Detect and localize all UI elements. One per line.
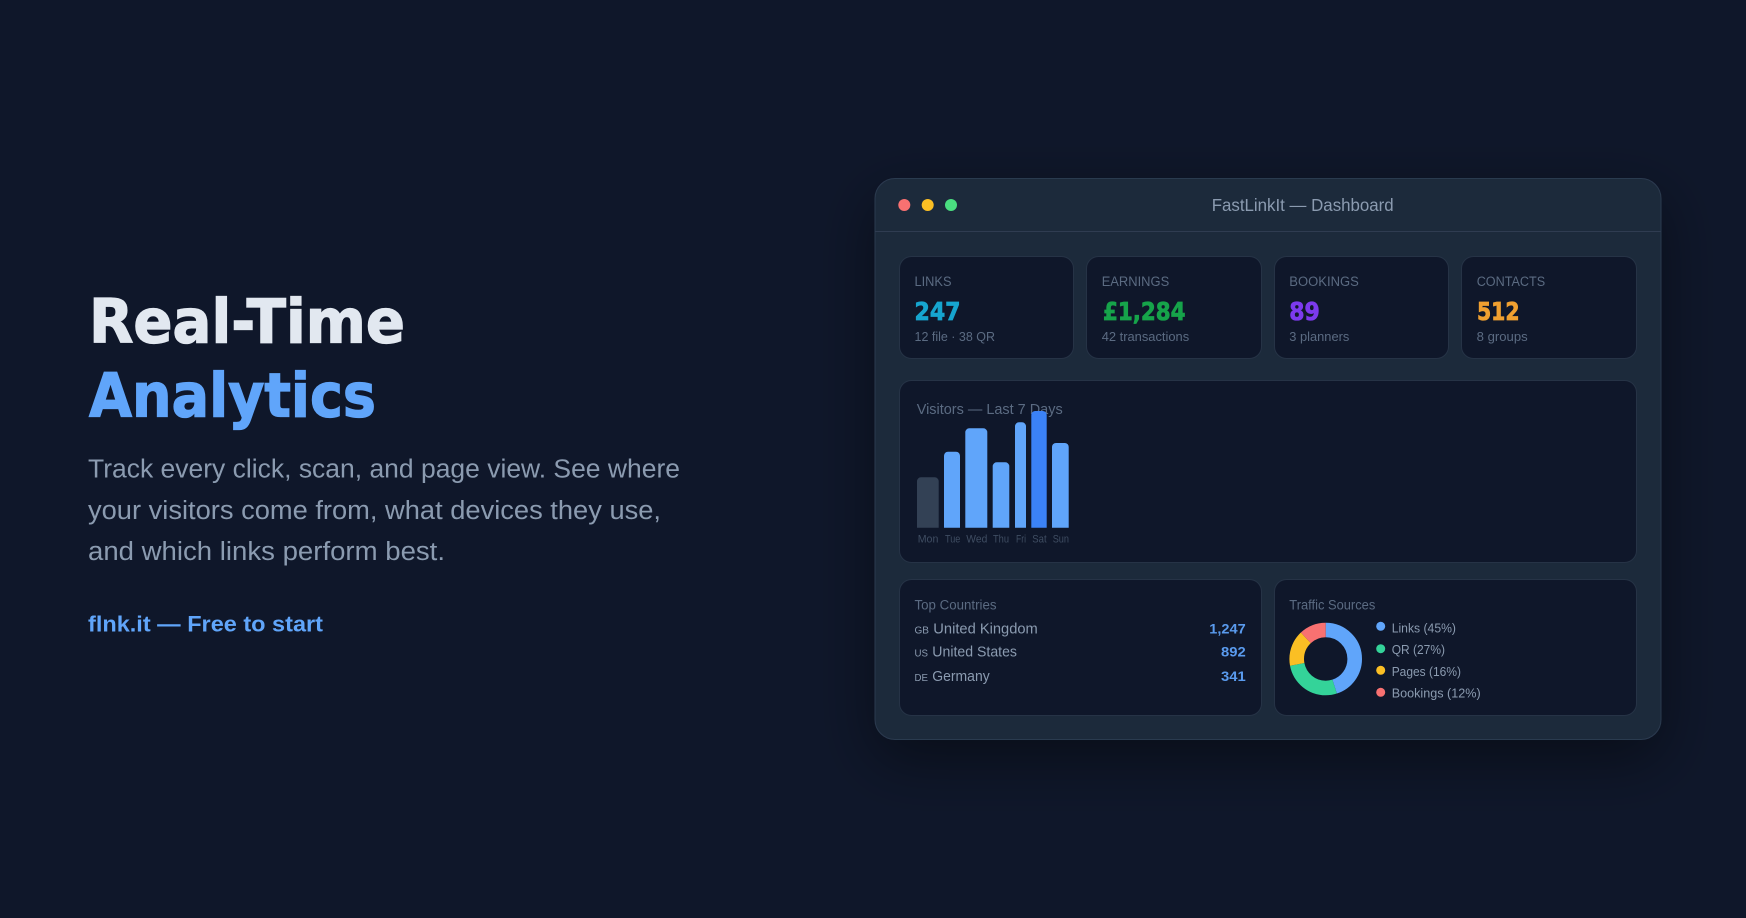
stat card: contacts [1462, 256, 1636, 358]
donut legend: Bookings (12%) [1392, 686, 1481, 701]
description text: and which links perform best. [88, 538, 445, 566]
stat card: earnings [1086, 256, 1262, 358]
row: United Kingdom: United Kingdom [933, 621, 1038, 637]
icon: window controls [898, 199, 957, 211]
stat card: earnings: EARNINGS [1102, 274, 1169, 289]
stat card: contacts: 8 groups [1477, 329, 1528, 344]
panel: traffic sources [1274, 580, 1636, 716]
chart day labels: Tue [945, 534, 960, 546]
panel: top countries [900, 580, 1262, 716]
chart day labels: Thu [993, 534, 1009, 546]
stat card: links: 12 file · 38 QR [914, 329, 995, 344]
stat card: earnings: £1,284 [1103, 297, 1186, 326]
row: United Kingdom [914, 620, 1246, 637]
stat card: contacts: CONTACTS [1477, 274, 1545, 289]
row: United Kingdom: 1,247 [1209, 620, 1246, 636]
title: Analytics [89, 362, 376, 432]
traffic heading: Traffic Sources [1289, 597, 1376, 612]
row: United States: US [914, 649, 928, 660]
stat card: links: LINKS [914, 274, 952, 289]
description text [88, 455, 680, 566]
title: Real-Time [89, 288, 405, 358]
description text: Track every click, scan, and page view. See where [88, 455, 680, 483]
title [89, 288, 405, 432]
stat card: links [900, 256, 1074, 358]
chart day labels: Sun [1053, 534, 1069, 546]
window title: FastLinkIt — Dashboard [1212, 195, 1394, 215]
chart heading: Visitors — Last 7 Days [917, 402, 1063, 418]
panel: dashboard window [875, 178, 1661, 740]
countries heading: Top Countries [914, 597, 997, 612]
panel: visitors chart [900, 380, 1636, 562]
stat card: links: 247 [914, 297, 960, 326]
row: United States: 892 [1221, 644, 1246, 660]
donut legend: Pages (16%) [1392, 664, 1461, 679]
chart day labels: Sat [1032, 534, 1047, 546]
donut legend [1376, 620, 1481, 701]
description text: your visitors come from, what devices they use, [88, 497, 661, 525]
stat card: bookings: 89 [1289, 297, 1320, 326]
bar chart [917, 411, 1069, 528]
stat card: earnings: 42 transactions [1102, 329, 1190, 344]
chart day labels: Mon [918, 534, 938, 546]
stat card: bookings: BOOKINGS [1289, 274, 1359, 289]
stat card: contacts: 512 [1477, 297, 1520, 326]
row: Germany: Germany [932, 669, 990, 685]
chart day labels [918, 534, 1069, 546]
row: Germany [914, 668, 1246, 685]
stat card: bookings [1274, 256, 1448, 358]
donut chart [1297, 630, 1355, 688]
row: United Kingdom: GB [914, 625, 929, 636]
donut legend: Links (45%) [1392, 620, 1456, 635]
row: Germany: DE [914, 673, 928, 684]
row: Germany: 341 [1221, 668, 1246, 684]
row: United States [914, 644, 1246, 661]
call to action link: flnk.it — Free to start [88, 612, 324, 637]
chart day labels: Wed [966, 534, 987, 546]
row: United States: United States [932, 645, 1017, 661]
title bar divider [875, 231, 1661, 232]
stat card: bookings: 3 planners [1289, 329, 1350, 344]
chart day labels: Fri [1016, 534, 1026, 546]
donut legend: QR (27%) [1392, 642, 1445, 657]
